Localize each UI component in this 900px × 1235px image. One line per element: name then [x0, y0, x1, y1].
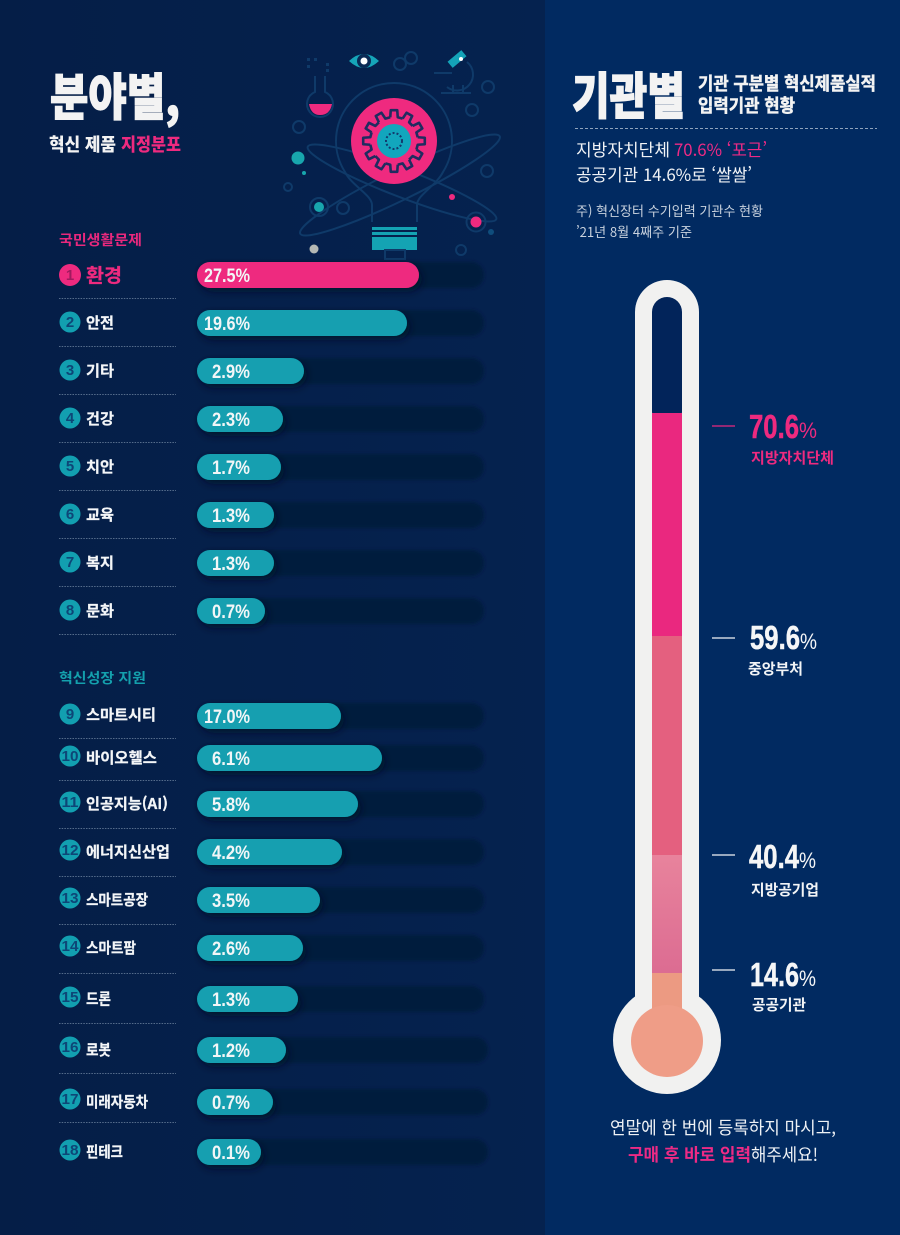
row 3 other: 2.9%: [212, 362, 250, 383]
row 8 culture: 문화: [86, 600, 114, 621]
row 5 public order: 치안: [86, 456, 114, 477]
row 7 welfare: 7: [66, 554, 74, 571]
microscope: [434, 50, 473, 93]
value 40.4: %: [799, 848, 816, 873]
row 3 other: 3: [66, 362, 74, 379]
row 18 fintech: 0.1%: [212, 1143, 250, 1164]
row 17 future car: 17: [62, 1091, 78, 1108]
row 11 AI: 5.8%: [212, 795, 250, 816]
level 59.6: [652, 636, 682, 855]
row 10 biohealth: 6.1%: [212, 749, 250, 770]
bulb base: [372, 227, 417, 250]
row 15 drone: 1.3%: [212, 990, 250, 1011]
row 3 other: [60, 358, 484, 384]
footnote: ’21년 8월 4째주 기준: [576, 221, 692, 241]
row 15 drone: [60, 986, 484, 1012]
row 18 fintech: 핀테크: [86, 1141, 123, 1162]
title: by institution: 입력기관 현황: [698, 92, 795, 118]
row 16 robot: 16: [62, 1039, 78, 1056]
row 3 other: 기타: [86, 360, 114, 381]
row 9 smart city: 스마트시티: [86, 704, 156, 725]
footnote: [576, 200, 763, 241]
row 10 biohealth: 10: [62, 748, 78, 765]
title: by field: 지정분포: [121, 131, 181, 157]
summary text: 공공기관 14.6%로 ‘쌀쌀’: [576, 161, 752, 186]
row 9 smart city: 17.0%: [204, 707, 250, 728]
row 2 safety: 19.6%: [204, 314, 250, 335]
row 12 new energy: 12: [62, 842, 78, 859]
row 12 new energy: 에너지신산업: [86, 841, 170, 862]
value 14.6: 공공기관: [752, 994, 806, 1015]
row 6 education: [60, 502, 484, 528]
summary text: [576, 136, 767, 186]
value 70.6: 70.6: [749, 408, 799, 445]
title: by field: [49, 58, 181, 157]
thermometer shell: [613, 280, 721, 1094]
value 70.6: 지방자치단체: [751, 447, 834, 468]
title: by field: 혁신 제품: [49, 131, 116, 157]
panel: right background: [545, 0, 900, 1235]
row 8 culture: 8: [66, 602, 74, 619]
row 14 smart farm: 2.6%: [212, 939, 250, 960]
row 1 environment: 1: [66, 267, 74, 284]
row 8 culture: [60, 598, 484, 624]
value 59.6: 59.6: [750, 619, 800, 656]
value 70.6: [712, 408, 834, 468]
title: by field: 분야별,: [50, 58, 180, 130]
title: by institution: [572, 57, 876, 129]
row 10 biohealth: 바이오헬스: [86, 747, 157, 768]
row 7 welfare: 1.3%: [212, 554, 250, 575]
row 18 fintech: [60, 1139, 488, 1165]
level 40.4: [652, 855, 682, 973]
row 4 health: 4: [66, 410, 75, 427]
row 17 future car: 미래자동차: [86, 1091, 148, 1112]
level 14.6: [652, 973, 682, 1013]
row 5 public order: 5: [66, 458, 74, 475]
summary text: 70.6% ‘포근’: [674, 136, 767, 161]
closing message: 구매 후 바로 입력: [628, 1142, 751, 1167]
row 16 robot: 1.2%: [212, 1041, 250, 1062]
value 59.6: [712, 619, 817, 679]
value 59.6: 중앙부처: [748, 658, 803, 679]
orbits: [294, 123, 506, 247]
closing message: [610, 1115, 836, 1167]
row 10 biohealth: [60, 745, 484, 771]
value 40.4: [712, 838, 819, 900]
heading: public life issues: 국민생활문제: [59, 230, 142, 250]
row 13 smart factory: 13: [62, 890, 78, 907]
closing message: 해주세요!: [751, 1142, 818, 1167]
row 1 environment: 27.5%: [204, 266, 250, 287]
row 2 safety: 안전: [86, 312, 114, 333]
row 15 drone: 15: [62, 989, 78, 1006]
row 15 drone: 드론: [86, 988, 111, 1009]
row 18 fintech: 18: [62, 1142, 78, 1159]
level 70.6: [652, 413, 682, 636]
value 40.4: 지방공기업: [751, 879, 819, 900]
row 6 education: 6: [66, 506, 74, 523]
eye: [349, 54, 379, 68]
row 9 smart city: [60, 703, 484, 729]
footnote: 주) 혁신장터 수기입력 기관수 현황: [576, 200, 763, 220]
row 4 health: 2.3%: [212, 410, 250, 431]
row 11 AI: 11: [62, 794, 78, 811]
row 14 smart farm: 스마트팜: [86, 937, 136, 958]
value 59.6: %: [800, 629, 817, 654]
value 14.6: 14.6: [750, 956, 799, 993]
row 4 health: [60, 406, 484, 432]
decorative dots: [284, 58, 494, 255]
row 16 robot: [60, 1036, 488, 1063]
heading: innovation growth support: 혁신성장 지원: [59, 668, 146, 688]
row 4 health: 건강: [86, 408, 114, 429]
teal hub: [377, 124, 411, 158]
icon: light bulb with gear and science symbols: [284, 50, 506, 259]
row 13 smart factory: 스마트공장: [86, 889, 148, 910]
panel: left background: [0, 0, 545, 1235]
row 7 welfare: 복지: [86, 552, 114, 573]
row 12 new energy: 4.2%: [212, 843, 250, 864]
value 14.6: %: [799, 966, 816, 991]
row 5 public order: 1.7%: [212, 458, 250, 479]
row 1 environment: [59, 261, 484, 288]
row 12 new energy: [60, 839, 484, 865]
row 1 environment: 환경: [86, 261, 122, 288]
row 2 safety: 2: [66, 314, 74, 331]
row 17 future car: [60, 1088, 488, 1115]
row 2 safety: [60, 310, 484, 336]
flask: [307, 76, 333, 117]
value 14.6: [712, 956, 816, 1015]
row 16 robot: 로봇: [86, 1039, 111, 1060]
row 9 smart city: 9: [66, 706, 74, 723]
title: by institution: 기관별: [572, 57, 685, 129]
bulb outline: [336, 83, 452, 222]
row 14 smart farm: [60, 935, 484, 961]
title: by institution: 기관 구분별 혁신제품실적: [698, 70, 876, 96]
row 14 smart farm: 14: [62, 938, 79, 955]
row 11 AI: [60, 791, 484, 817]
row 6 education: 1.3%: [212, 506, 250, 527]
tube empty: [652, 297, 682, 427]
summary text: 지방자치단체: [576, 136, 670, 161]
bulb: [631, 1005, 703, 1077]
row 11 AI: 인공지능(AI): [86, 793, 168, 814]
gear: [363, 110, 425, 172]
row 5 public order: [60, 454, 484, 480]
value 70.6: %: [799, 418, 817, 443]
row 13 smart factory: [60, 887, 484, 913]
row 6 education: 교육: [86, 504, 114, 525]
thermometer: [613, 280, 721, 1094]
pink circle: [351, 98, 437, 184]
closing message: 연말에 한 번에 등록하지 마시고,: [610, 1115, 836, 1140]
row 17 future car: 0.7%: [212, 1093, 250, 1114]
row 13 smart factory: 3.5%: [212, 891, 250, 912]
row 7 welfare: [60, 550, 484, 576]
row 8 culture: 0.7%: [212, 602, 250, 623]
value 40.4: 40.4: [749, 838, 799, 875]
